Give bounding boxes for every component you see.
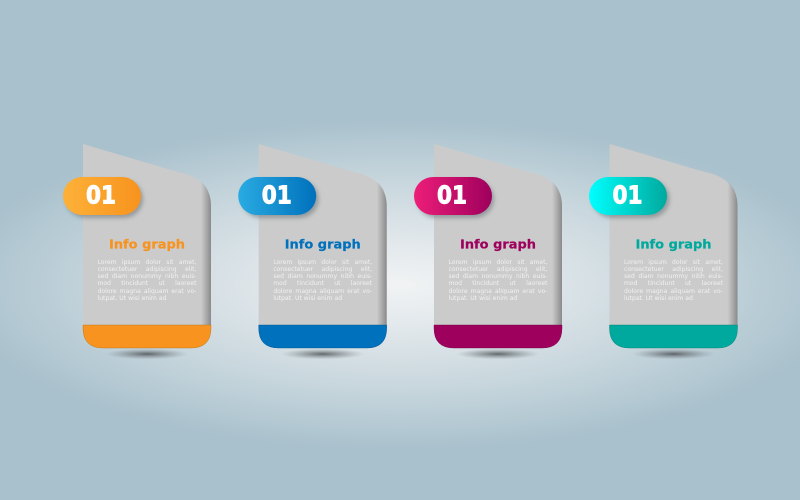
card body: [610, 144, 738, 348]
body text: lutpat. Ut wisi enim ad: [448, 295, 517, 302]
number: 01: [86, 180, 116, 210]
floor shadow: [281, 348, 365, 360]
body text: sed diam nonummy nibh euis-: [448, 273, 548, 280]
body text: dolore magna aliquam erat vo-: [98, 288, 196, 294]
body text: lutpat. Ut wisi enim ad: [273, 295, 342, 302]
body text: [273, 258, 373, 304]
panel: card 3 magenta: [414, 144, 562, 360]
panel: card 4 teal: [589, 144, 738, 360]
card body: [259, 144, 387, 348]
colour band: [83, 325, 211, 348]
pill shadow: [592, 180, 670, 218]
floor shadow: [105, 348, 189, 360]
body text: dolore magna aliquam erat vo-: [273, 288, 372, 294]
body text: Lorem ipsum dolor sit amet,: [98, 258, 196, 266]
floor shadow: [632, 348, 716, 360]
body text: consectetuer adipiscing elit,: [273, 266, 372, 273]
card edge shading: [728, 181, 738, 325]
heading: Info graph: [460, 236, 536, 252]
body text: lutpat. Ut wisi enim ad: [98, 295, 166, 302]
panel: card 2 blue: [238, 144, 387, 360]
body text: mod tincidunt ut laoreet: [624, 280, 723, 287]
body text: Lorem ipsum dolor sit amet,: [448, 258, 548, 266]
panel: card 1 orange: [63, 144, 211, 360]
body text: mod tincidunt ut laoreet: [273, 280, 372, 287]
pill shadow: [242, 180, 319, 218]
body text: [98, 258, 198, 304]
body text: lutpat. Ut wisi enim ad: [624, 295, 693, 302]
card body: [434, 144, 562, 348]
number: 01: [437, 180, 467, 210]
card edge shading: [201, 181, 211, 325]
floor shadow: [456, 348, 540, 360]
number pill: [414, 177, 492, 215]
body text: Lorem ipsum dolor sit amet,: [624, 258, 723, 266]
body text: sed diam nonummy nibh euis-: [98, 273, 196, 280]
body text: mod tincidunt ut laoreet: [448, 280, 548, 287]
colour band: [259, 325, 387, 348]
number: 01: [262, 180, 292, 210]
pill shadow: [417, 180, 494, 218]
body text: sed diam nonummy nibh euis-: [273, 273, 372, 280]
colour band: [434, 325, 562, 348]
card body: [83, 144, 211, 348]
body text: sed diam nonummy nibh euis-: [624, 273, 723, 280]
number pill: [589, 177, 667, 215]
number pill: [238, 177, 316, 215]
body text: dolore magna aliquam erat vo-: [448, 288, 548, 294]
card edge shading: [377, 181, 387, 325]
body text: [624, 258, 724, 304]
number pill: [63, 177, 141, 215]
body text: Lorem ipsum dolor sit amet,: [273, 258, 372, 266]
card edge shading: [552, 181, 562, 325]
pill shadow: [66, 180, 143, 218]
heading: Info graph: [636, 236, 712, 252]
heading: Info graph: [109, 236, 185, 252]
heading: Info graph: [285, 236, 361, 252]
body text: consectetuer adipiscing elit,: [98, 266, 196, 273]
body text: mod tincidunt ut laoreet: [98, 280, 196, 287]
colour band: [610, 325, 738, 348]
body text: consectetuer adipiscing elit,: [448, 266, 548, 273]
number: 01: [612, 180, 642, 210]
body text: [448, 258, 548, 304]
body text: consectetuer adipiscing elit,: [624, 266, 723, 273]
body text: dolore magna aliquam erat vo-: [624, 288, 723, 294]
